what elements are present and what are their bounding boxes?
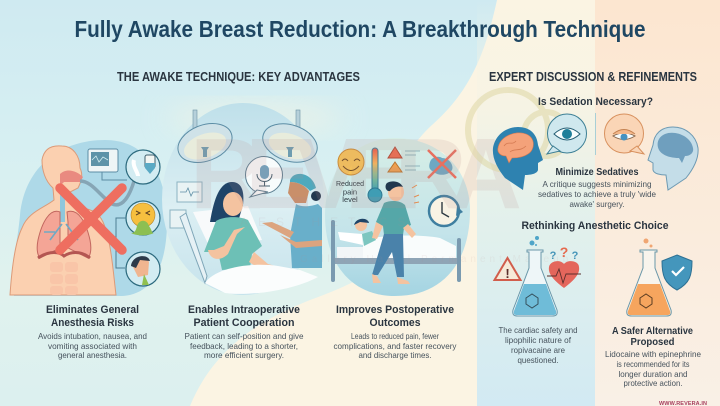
panel: postoperative outcomes text: Leads to reduced pain, fewer bbox=[351, 331, 439, 341]
panel: postoperative outcomes text bbox=[334, 304, 457, 360]
text: safer alternative: protective action. bbox=[624, 378, 682, 388]
text: safer alternative: Proposed bbox=[630, 336, 674, 348]
watermark: Gallery Hair | Permanent Makeup bbox=[300, 254, 572, 265]
flask bbox=[513, 250, 557, 316]
text: safer alternative: is recommended for its bbox=[616, 359, 690, 369]
illustration: lidocaine flask and shield bbox=[627, 238, 692, 316]
illustration: postoperative outcomes bbox=[325, 138, 470, 296]
heart with pulse bbox=[549, 261, 579, 288]
panel: postoperative outcomes text: and discharge times. bbox=[358, 350, 432, 360]
panel: eliminates general anesthesia text: Avoids intubation, nausea, and bbox=[38, 331, 147, 341]
watermark: AESTHETICS bbox=[240, 215, 415, 229]
panel: postoperative outcomes text: Outcomes bbox=[370, 317, 420, 329]
nurse bbox=[262, 174, 322, 268]
panel: eliminates general anesthesia text bbox=[38, 304, 147, 360]
panel: eliminates general anesthesia text: Eliminates General bbox=[46, 304, 139, 316]
subheading: is sedation necessary: Is Sedation Necessary? bbox=[538, 96, 653, 108]
illustration: ropivacaine flask: ? bbox=[560, 244, 568, 260]
shield bbox=[662, 255, 692, 290]
text: minimize sedatives: sedatives to achieve a truly 'wide bbox=[538, 189, 656, 199]
bed bbox=[180, 213, 207, 283]
icon: vomiting person bbox=[126, 252, 160, 286]
panel: patient cooperation text: Patient Cooperation bbox=[194, 317, 295, 329]
watermark: REVERA bbox=[190, 118, 522, 230]
breathing tube bbox=[80, 174, 136, 205]
illustration: ropivacaine flask: ! bbox=[505, 266, 510, 281]
heading: key advantages: THE AWAKE TECHNIQUE: KEY ADVANTAGES bbox=[117, 70, 360, 84]
text: safer alternative: A Safer Alternative bbox=[612, 325, 693, 337]
text: minimize sedatives: Minimize Sedatives bbox=[556, 167, 639, 178]
panel: patient cooperation text: feedback, leading to a shorter, bbox=[190, 341, 298, 351]
panel: patient cooperation text: Enables Intraoperative bbox=[188, 304, 300, 316]
title: Fully Awake Breast Reduction: A Breakthrough Technique bbox=[74, 16, 646, 42]
text: cardiac safety: The cardiac safety and bbox=[498, 325, 578, 335]
illustration: patient cooperation bbox=[162, 103, 324, 295]
illustration: ropivacaine flask: ? bbox=[550, 250, 557, 262]
warning triangle bbox=[494, 258, 520, 280]
text: minimize sedatives: awake' surgery. bbox=[570, 199, 624, 209]
human torso bbox=[10, 146, 116, 295]
icon: thermometer bbox=[368, 148, 382, 202]
icon: awake head bbox=[493, 127, 543, 190]
text: minimize sedatives bbox=[538, 167, 656, 209]
icon: complications crossed out bbox=[428, 150, 456, 178]
icon: nausea face bbox=[126, 201, 160, 235]
panel: eliminates general anesthesia text: general anesthesia. bbox=[58, 350, 127, 360]
illustration: ropivacaine flask: ? bbox=[572, 250, 579, 262]
icon: eye bubble bbox=[547, 114, 586, 154]
illustration: ropivacaine flask bbox=[494, 236, 581, 316]
illustration: sedation brains and bubbles bbox=[493, 113, 698, 190]
icon: warnings bbox=[388, 147, 420, 172]
text: cardiac safety bbox=[498, 325, 578, 365]
text: cardiac safety: lipophilic nature of bbox=[505, 335, 572, 345]
panel: postoperative outcomes text: Improves Postoperative bbox=[336, 304, 454, 316]
patient bbox=[204, 182, 318, 294]
text: safer alternative: longer duration and bbox=[618, 369, 688, 379]
panel: eliminates general anesthesia text: vomiting associated with bbox=[48, 341, 137, 351]
text: minimize sedatives: A critique suggests minimizing bbox=[542, 179, 652, 189]
speech bubble with microphone bbox=[246, 156, 282, 197]
panel: patient cooperation text: Patient can self-position and give bbox=[184, 331, 304, 341]
icon: smile bbox=[338, 149, 364, 175]
text: reduced pain level bbox=[336, 179, 364, 204]
watermark rings bbox=[468, 90, 568, 170]
walking patient bbox=[372, 181, 416, 284]
text: safer alternative bbox=[605, 325, 701, 388]
illustration: eliminates general anesthesia risks bbox=[10, 140, 167, 296]
panel: patient cooperation text: more efficient surgery. bbox=[204, 350, 284, 360]
text: cardiac safety: questioned. bbox=[518, 355, 558, 365]
text: safer alternative: Lidocaine with epinephrine bbox=[605, 349, 701, 359]
bed with patient bbox=[331, 219, 461, 282]
monitor bbox=[170, 182, 202, 228]
text: reduced pain level: Reduced bbox=[336, 179, 364, 188]
icon: sedated head bbox=[648, 127, 698, 190]
panel: patient cooperation text bbox=[184, 304, 304, 360]
panel: postoperative outcomes text: complications, and faster recovery bbox=[334, 341, 457, 351]
surgical lights bbox=[173, 110, 322, 169]
icon: sedated eye bubble bbox=[604, 114, 644, 154]
text: cardiac safety: ropivacaine are bbox=[511, 345, 565, 355]
subheading: rethinking anesthetic choice: Rethinking Anesthetic Choice bbox=[522, 220, 668, 232]
backdrop blob bbox=[13, 140, 167, 296]
monitor bbox=[88, 149, 127, 180]
icon: clock bbox=[429, 196, 463, 226]
icon: IV bag bbox=[126, 150, 160, 184]
text: reduced pain level: level bbox=[342, 195, 358, 204]
text: reduced pain level: pain bbox=[343, 188, 357, 196]
flask bbox=[627, 250, 671, 316]
panel: eliminates general anesthesia text: Anesthesia Risks bbox=[51, 317, 134, 329]
watermark bbox=[190, 118, 572, 265]
heading: expert discussion: EXPERT DISCUSSION & REFINEMENTS bbox=[489, 70, 697, 84]
red cross-out bbox=[60, 188, 122, 250]
